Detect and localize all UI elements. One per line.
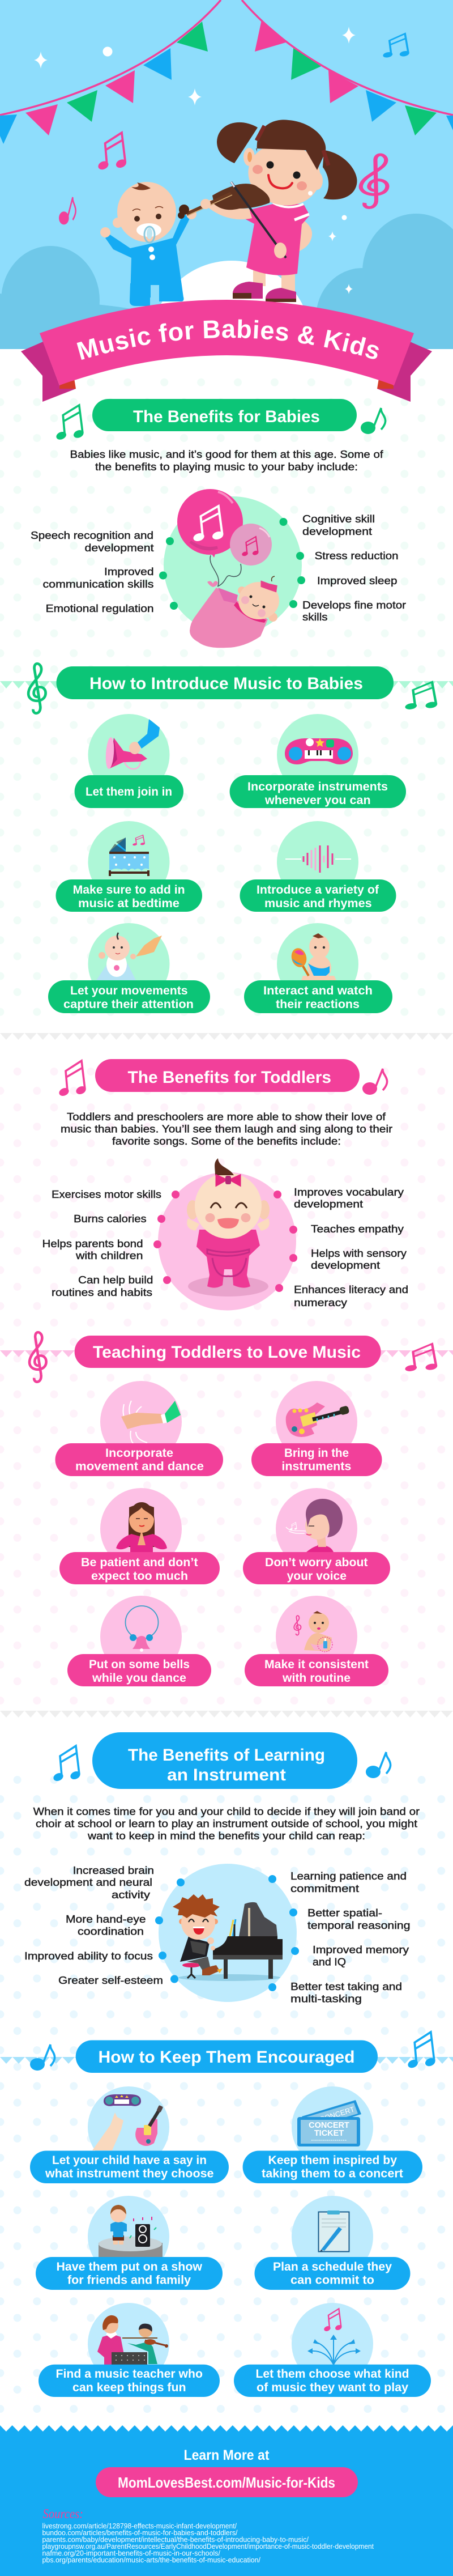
card: bedtime music xyxy=(55,821,202,912)
diagram circle xyxy=(158,1172,296,1310)
card: take them to a concert: TICKET xyxy=(314,2129,344,2138)
icon: blue double note xyxy=(407,2032,437,2069)
panel: how to keep them encouraged xyxy=(0,2032,453,2397)
card: don't worry about your voice: your voice xyxy=(287,1570,347,1583)
card: child has a say: Let your child have a say in xyxy=(52,2154,207,2167)
card: movements capture attention: Let your movements xyxy=(70,984,188,997)
labels: toddler benefits left: Can help build xyxy=(78,1274,153,1286)
labels: baby benefits right: skills xyxy=(302,611,328,623)
labels: toddler benefits right: development xyxy=(311,1259,380,1271)
card: take them to a concert: CONCERT xyxy=(309,2121,349,2130)
card: consistent with routine: Make it consistent xyxy=(264,1658,369,1671)
sources list xyxy=(42,2522,374,2564)
white hill xyxy=(152,261,311,419)
panel: benefits for babies xyxy=(31,399,406,648)
text: toddlers intro: music than babies. You’ll see them laugh and sing along to their xyxy=(61,1123,392,1134)
card: choose the music: Let them choose what kind xyxy=(256,2367,409,2381)
heading: benefits for toddlers xyxy=(95,1059,360,1092)
labels: toddler benefits right: Helps with sensory xyxy=(311,1247,407,1259)
heading: benefits for toddlers: The Benefits for Toddlers xyxy=(128,1068,331,1087)
text: instrument intro xyxy=(33,1805,420,1842)
labels: baby benefits right: Stress reduction xyxy=(315,550,399,562)
labels: toddler benefits left: Burns calories xyxy=(74,1213,147,1225)
icon: green single note xyxy=(361,408,386,434)
labels: toddler benefits right: Teaches empathy xyxy=(311,1223,404,1235)
icon: pink double note xyxy=(97,133,127,171)
text: learn more: Learn More at xyxy=(183,2447,270,2463)
icon: blue single note xyxy=(30,2044,55,2071)
card: interact and watch xyxy=(244,923,392,1013)
card: movements capture attention xyxy=(48,923,210,1013)
card: consistent with routine xyxy=(245,1596,388,1686)
card: variety of music: music and rhymes xyxy=(264,897,372,910)
card: find a music teacher: can keep things fun xyxy=(72,2381,186,2394)
bunting left xyxy=(0,0,221,144)
heading: benefits for babies: The Benefits for Babies xyxy=(133,407,320,426)
panel: footer xyxy=(0,2425,453,2576)
card: choose the music xyxy=(234,2303,431,2397)
sources list: parents.com/baby/development/intellectual/the-benefits-of-introducing-baby-to-music/ xyxy=(42,2536,309,2544)
card: be patient xyxy=(59,1488,220,1584)
card: choose the music: of music they want to play xyxy=(257,2381,408,2394)
text: toddlers intro xyxy=(61,1111,392,1147)
illustration: baby xyxy=(100,182,196,306)
icon: blue single note xyxy=(366,1752,391,1778)
card: put on a show: for friends and family xyxy=(67,2273,191,2287)
labels: toddler benefits right: numeracy xyxy=(294,1296,348,1308)
link pill: MomLovesBest.com/Music-for-Kids xyxy=(118,2474,335,2491)
labels: toddler benefits right: development xyxy=(294,1198,363,1210)
card: bring in the instruments xyxy=(251,1381,382,1476)
card: don't worry about your voice: Don’t worry about xyxy=(265,1556,368,1569)
heading: benefits of learning: The Benefits of Learning xyxy=(128,1746,325,1765)
labels: baby benefits left: Emotional regulation xyxy=(46,602,154,614)
card: movement and dance xyxy=(55,1381,223,1476)
icon: pink clef xyxy=(29,1332,46,1382)
labels: instrument benefits left: Improved ability to focus xyxy=(24,1950,153,1962)
title banner xyxy=(21,300,432,402)
card: find a music teacher xyxy=(39,2303,220,2397)
card: be patient: Be patient and don’t xyxy=(81,1556,198,1569)
sources list: playgroupnsw.org.au/ParentResources/EarlyChildhoodDevelopment/importance-of-music-toddler-development xyxy=(42,2543,374,2551)
labels: toddler benefits right: Enhances literacy and xyxy=(294,1283,408,1295)
sparkles xyxy=(34,27,356,294)
card: interact and watch: Interact and watch xyxy=(263,984,373,997)
icon: pink single note xyxy=(362,1069,387,1095)
labels: toddler benefits left: Helps parents bond xyxy=(42,1238,143,1249)
labels: instrument benefits left xyxy=(24,1864,185,1986)
hills xyxy=(0,214,453,367)
text: babies intro xyxy=(70,448,383,473)
labels: instrument benefits right: Better spatial- xyxy=(307,1907,382,1919)
card: variety of music xyxy=(240,821,396,912)
card: take them to a concert: taking them to a concert xyxy=(262,2167,403,2180)
card: child has a say: what instrument they choose xyxy=(45,2167,213,2180)
labels: baby benefits right: development xyxy=(302,525,372,537)
labels: toddler benefits left: with children xyxy=(75,1249,143,1261)
labels: instrument benefits left: development and neural xyxy=(24,1876,152,1888)
card: take them to a concert xyxy=(243,2086,422,2183)
icon: green double note xyxy=(55,405,85,441)
icon: blue note xyxy=(382,33,411,58)
labels: instrument benefits right: Better test taking and xyxy=(290,1980,402,1992)
labels: toddler benefits left xyxy=(42,1188,180,1298)
labels: toddler benefits right xyxy=(273,1186,408,1308)
panel: hero illustration xyxy=(0,0,453,419)
labels: baby benefits right: Cognitive skill xyxy=(302,513,375,525)
text: babies intro: Babies like music, and it’s good for them at this age. Some of xyxy=(70,448,383,460)
card: variety of music: Introduce a variety of xyxy=(257,883,379,896)
illustration: boy at piano xyxy=(173,1894,283,1981)
link pill xyxy=(96,2467,358,2497)
labels: toddler benefits left: Exercises motor skills xyxy=(52,1188,161,1200)
card: bring in the instruments: Bring in the xyxy=(284,1447,349,1460)
card: put on bells: Put on some bells xyxy=(89,1658,190,1671)
panel: how to introduce music xyxy=(0,664,453,1013)
icon: pink treble clef xyxy=(357,154,394,209)
heading: keep them encouraged xyxy=(76,2040,378,2073)
labels: instrument benefits right: Improved memory xyxy=(313,1944,409,1956)
card: plan a schedule: Plan a schedule they xyxy=(273,2260,392,2273)
labels: instrument benefits right: temporal reasoning xyxy=(307,1919,410,1931)
labels: baby benefits right: Improved sleep xyxy=(317,575,398,586)
heading: benefits of learning: an Instrument xyxy=(167,1766,286,1784)
card: incorporate instruments: whenever you can xyxy=(264,794,371,807)
card: put on a show xyxy=(36,2196,223,2290)
text: babies intro: the benefits to playing music to your baby include: xyxy=(95,461,358,473)
illustration: balloons and baby xyxy=(177,489,279,648)
icon: green clef xyxy=(28,664,46,713)
labels: baby benefits left: development xyxy=(85,542,154,554)
card: let them join in: Let them join in xyxy=(86,785,172,798)
diagram circle xyxy=(159,1864,297,2002)
labels: toddler benefits right: Improves vocabulary xyxy=(294,1186,404,1198)
card: find a music teacher: Find a music teacher who xyxy=(55,2367,203,2381)
sources list: nafme.org/20-important-benefits-of-music-in-our-schools/ xyxy=(42,2549,221,2557)
card: be patient: expect too much xyxy=(91,1570,188,1583)
heading: keep them encouraged: How to Keep Them Encouraged xyxy=(99,2048,354,2067)
card: let them join in xyxy=(75,714,183,808)
panel: teaching toddlers xyxy=(0,1332,453,1686)
heading: how to introduce: How to Introduce Music to Babies xyxy=(89,674,363,693)
labels: instrument benefits left: activity xyxy=(112,1889,151,1901)
text: toddlers intro: Toddlers and preschoolers are more able to show their love of xyxy=(67,1111,386,1123)
labels: instrument benefits left: Increased brain xyxy=(73,1864,154,1876)
card: incorporate instruments: Incorporate instruments xyxy=(247,780,388,793)
card: bedtime music: music at bedtime xyxy=(78,897,180,910)
labels: baby benefits left xyxy=(31,529,178,614)
heading: teaching toddlers: Teaching Toddlers to Love Music xyxy=(93,1343,361,1362)
labels: instrument benefits left: More hand-eye xyxy=(66,1913,146,1925)
illustration: laughing toddler xyxy=(187,1158,270,1296)
card: take them to a concert: CONCERT xyxy=(318,2105,356,2124)
labels: instrument benefits left: coordination xyxy=(78,1925,144,1937)
card: put on bells: while you dance xyxy=(92,1672,186,1685)
card: movements capture attention: capture their attention xyxy=(63,998,194,1011)
card: consistent with routine: with routine xyxy=(282,1672,351,1685)
heading: teaching toddlers xyxy=(75,1336,381,1368)
card: child has a say xyxy=(30,2086,229,2183)
card: incorporate instruments xyxy=(230,714,406,808)
icon: pink double note xyxy=(58,1061,87,1098)
heading: how to introduce xyxy=(57,666,394,699)
text: instrument intro: choir at school or learn to play an instrument outside of school, you might xyxy=(36,1818,417,1830)
panel: dotted section backgrounds xyxy=(0,377,453,2415)
title banner: Music for Babies & Kids xyxy=(77,320,379,360)
icon: green note right xyxy=(404,682,439,711)
panel: benefits of learning an instrument xyxy=(24,1732,420,2005)
labels: instrument benefits right: and IQ xyxy=(313,1956,346,1967)
card: interact and watch: their reactions xyxy=(276,998,360,1011)
diagram circle xyxy=(164,496,302,635)
card: put on a show: Have them put on a show xyxy=(57,2260,203,2273)
labels: toddler benefits left: routines and habits xyxy=(52,1286,152,1298)
labels: instrument benefits right: commitment xyxy=(290,1882,359,1894)
icon: pink note right xyxy=(404,1344,439,1372)
card: bedtime music: Make sure to add in xyxy=(73,883,185,896)
card: movement and dance: Incorporate xyxy=(105,1447,173,1460)
sources list: livestrong.com/article/128798-effects-music-infant-development/ xyxy=(42,2522,237,2530)
sources list: pbs.org/parents/education/music-arts/the-benefits-of-music-education/ xyxy=(42,2556,261,2564)
text: toddlers intro: favorite songs. Some of the benefits include: xyxy=(112,1135,341,1147)
card: bring in the instruments: instruments xyxy=(281,1460,351,1473)
panel: benefits for toddlers xyxy=(42,1059,408,1310)
card: plan a schedule: can commit to xyxy=(290,2273,374,2287)
labels: instrument benefits right: multi-tasking xyxy=(290,1992,362,2005)
labels: baby benefits left: Speech recognition and xyxy=(31,529,153,541)
bunting right xyxy=(242,0,453,135)
labels: baby benefits right xyxy=(280,513,406,623)
icon: pink single note xyxy=(59,197,76,224)
card: movement and dance: movement and dance xyxy=(75,1460,204,1473)
icon: blue double note xyxy=(52,1746,82,1783)
heading: benefits of learning xyxy=(92,1732,357,1789)
text: instrument intro: want to keep in mind the benefits your child can reap: xyxy=(87,1830,365,1842)
illustration: girl with violin xyxy=(178,120,357,302)
labels: instrument benefits right xyxy=(268,1870,410,2005)
sources list: bundoo.com/articles/benefits-of-music-for-babies-and-toddlers/ xyxy=(42,2529,238,2537)
labels: instrument benefits left: Greater self-esteem xyxy=(58,1974,163,1986)
labels: baby benefits left: communication skills xyxy=(43,578,154,590)
labels: baby benefits left: Improved xyxy=(104,566,154,577)
heading: benefits for babies xyxy=(92,399,357,431)
labels: baby benefits right: Develops fine motor xyxy=(302,599,406,611)
text: instrument intro: When it comes time for you and your child to decide if they will join band or xyxy=(33,1805,420,1817)
card: take them to a concert: Keep them inspired by xyxy=(268,2154,397,2167)
card: don't worry about your voice xyxy=(243,1488,390,1584)
labels: instrument benefits right: Learning patience and xyxy=(290,1870,407,1882)
card: plan a schedule xyxy=(255,2196,410,2290)
card: put on bells xyxy=(67,1596,211,1686)
sources heading: Sources: xyxy=(43,2507,83,2522)
